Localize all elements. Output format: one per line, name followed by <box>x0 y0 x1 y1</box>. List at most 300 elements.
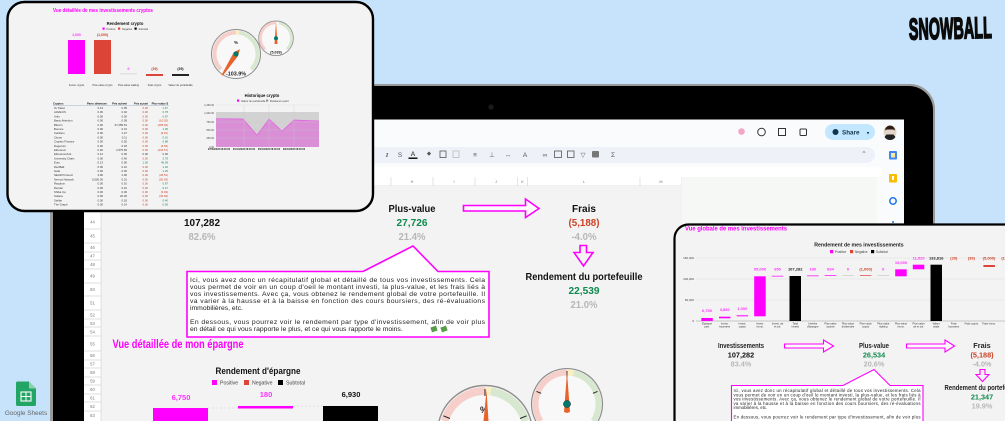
table: crypto holdings: 0.00 <box>143 169 148 173</box>
table: crypto holdings: 0.00 <box>143 203 148 207</box>
table: crypto holdings: 0.95 <box>122 161 127 165</box>
table: crypto holdings: 0.00 <box>98 182 103 186</box>
logo: Google Sheets <box>5 382 47 417</box>
bar chart: overall return: crypto <box>739 324 746 328</box>
bar chart: crypto return: Positive <box>106 27 116 31</box>
table: crypto holdings: 0.02 <box>122 110 127 114</box>
column headers: L <box>583 180 585 184</box>
table: crypto holdings: Ankr <box>54 114 60 118</box>
table: crypto holdings: University Chain <box>54 156 75 160</box>
plus-value figures <box>859 342 889 366</box>
table: crypto holdings: (265.93) <box>158 123 168 127</box>
table: crypto holdings: 0.00 <box>98 135 103 139</box>
table: crypto holdings: 0.00 <box>143 148 148 152</box>
portfolio return figures: 21,347 <box>971 392 993 402</box>
legend <box>212 380 305 386</box>
table: crypto holdings: 0.00 <box>98 194 103 198</box>
bar chart: overall return: Rendement de mes investissements <box>814 242 904 248</box>
spreadsheet screen <box>84 120 904 421</box>
bar chart: crypto return: 1,000 <box>72 33 81 37</box>
bar chart: crypto return: Invest. crypto <box>69 83 85 87</box>
bar chart: overall return: (1,000) <box>859 266 873 272</box>
table: crypto holdings: 0.00 <box>143 140 148 144</box>
table: crypto holdings: 5,000.00 <box>92 177 103 181</box>
toolbar: ↔ <box>505 152 511 159</box>
table: crypto holdings: Euro <box>54 161 60 165</box>
bar chart: overall return: (5,000) <box>983 256 996 260</box>
line chart: crypto history: 09/10/2023 08:00:00 <box>283 148 306 151</box>
bar chart: crypto return: Plus-value crypto <box>93 83 113 87</box>
tablet device <box>50 84 935 421</box>
table: crypto holdings: 0.00 <box>122 114 127 118</box>
table: crypto holdings: 0.10 <box>163 135 168 139</box>
bar chart: overall return: Invest. art <box>772 322 784 326</box>
table: crypto holdings: 0.95 <box>163 203 168 207</box>
bar chart: crypto return: Rendement crypto <box>107 21 144 26</box>
toolbar: ⊥ <box>489 152 495 159</box>
panel title: Vue globale de mes investissements <box>685 226 788 232</box>
table: crypto holdings: (3.53) <box>161 144 168 148</box>
table: crypto holdings: (9.16) <box>161 131 168 135</box>
callout: explanation <box>732 370 923 421</box>
arrow: plus-value to fees <box>464 199 539 218</box>
row numbers: 54 <box>90 330 95 334</box>
bar chart: overall return: boursiers <box>948 324 960 328</box>
bar chart: overall return: 6,750 <box>702 308 713 313</box>
line chart: crypto history: 05/10/2023 08:00:00 <box>258 148 281 151</box>
table: crypto holdings: DéciBall <box>54 165 65 169</box>
toolbar: ⌃ <box>861 150 867 158</box>
column headers: K <box>521 180 524 184</box>
fees figures: Frais <box>973 341 991 350</box>
table: crypto holdings: 0.18 <box>122 198 127 202</box>
bar chart: overall return: actions <box>826 324 835 328</box>
bar chart: overall return: Negative <box>855 250 868 254</box>
table: crypto holdings: 0.00 <box>98 140 103 144</box>
table: crypto holdings <box>53 102 169 207</box>
table: crypto holdings: 0.00 <box>98 203 103 207</box>
chart: savings return: Rendement d'épargne <box>216 366 300 377</box>
table: crypto holdings: 1.02 <box>163 165 168 169</box>
chart: savings return: 180 <box>260 390 272 399</box>
panel: crypto detail <box>8 2 373 211</box>
table: crypto holdings: 1.00 <box>143 161 148 165</box>
table: crypto holdings: Ethereum <box>54 148 67 152</box>
toolbar: ▽ <box>580 152 586 159</box>
table: crypto holdings: 0.00 <box>143 182 148 186</box>
line chart: crypto history: Valeur du portefeuille <box>241 99 266 103</box>
investments figures: 107,282 <box>184 217 220 229</box>
table: crypto holdings: Plus-value $ <box>152 102 168 106</box>
plus-value figures: Plus-value <box>388 203 436 215</box>
table: crypto holdings: 0.01 <box>122 177 127 181</box>
table: crypto holdings: 0.00 <box>143 114 148 118</box>
portfolio return figures <box>526 271 643 311</box>
table: crypto holdings: 3.96 <box>98 173 103 177</box>
callout: explanation: vos investissements. Avec ça, vous obtenez le rendement global de votre portefeuille. Il <box>190 291 485 298</box>
bar chart: overall return: art et cie. <box>913 324 924 328</box>
bar chart: overall return: Plus-value <box>842 322 855 326</box>
bar chart: overall return: Positive <box>835 250 846 254</box>
bar chart: overall return: Valeur <box>933 322 940 326</box>
gauge: savings amount <box>532 369 602 421</box>
toolbar: ≡ <box>473 152 477 159</box>
bar chart: overall return: (39) <box>968 256 976 260</box>
callout: explanation: immobilières, etc. <box>190 305 243 312</box>
bar chart: overall return: 1,000 <box>737 306 748 311</box>
line chart: crypto history: 1,000.00 <box>204 112 215 115</box>
header actions <box>738 124 896 140</box>
table: crypto holdings: 0.00 <box>98 119 103 123</box>
bar chart: overall return: 15,000 <box>895 260 908 265</box>
table: crypto holdings: Shiba Inu <box>54 190 66 194</box>
bar chart: crypto return: 0 <box>128 67 130 71</box>
toolbar: A <box>523 152 528 159</box>
bar chart: crypto return <box>68 21 193 87</box>
gauge: crypto percent: -103.9% <box>226 72 246 78</box>
investments figures <box>184 217 220 243</box>
callout: explanation: en détail ce qui vous rapporte le plus, et ce qui vous rapporte le moins. <box>190 326 403 333</box>
bar chart: overall return: totale <box>933 324 940 328</box>
bar chart: overall return: Épargne <box>702 320 712 326</box>
table: crypto holdings: Raydium <box>54 182 66 186</box>
row numbers: 47 <box>90 254 95 258</box>
table: crypto holdings: 0.00 <box>143 119 148 123</box>
table: crypto holdings: 0.00 <box>98 123 103 127</box>
investments figures: Investissements <box>718 341 764 350</box>
table: crypto holdings: Parts détenues <box>87 102 107 106</box>
fees figures: Frais <box>572 203 596 215</box>
bar chart: overall return: crypto <box>862 324 870 328</box>
bar chart: overall return: Intérêts <box>808 322 818 326</box>
table: crypto holdings: 0.00 <box>143 177 148 181</box>
row numbers: 45 <box>90 234 95 238</box>
legend: Positive <box>220 380 238 386</box>
fees figures: -4.0% <box>972 360 992 368</box>
gauge: crypto percent: % <box>234 40 238 45</box>
table: crypto holdings: Ethereumclub <box>54 152 72 156</box>
callout: explanation: Ici, vous avez donc un récapitulatif global et détaillé de tous vos investissements. Cela <box>190 277 485 284</box>
bar chart: overall return: 95,000 <box>754 266 767 272</box>
table: crypto holdings: 0.87 <box>163 182 168 186</box>
table: crypto holdings: 0.00 <box>143 127 148 131</box>
bar chart: overall return: staking <box>879 324 888 328</box>
table: crypto holdings: 0.13 <box>98 106 103 110</box>
table: crypto holdings: (50.93) <box>159 177 168 181</box>
chart: savings return <box>153 366 378 421</box>
table: crypto holdings: (45.93) <box>159 194 168 198</box>
fees figures: -4.0% <box>572 231 597 243</box>
line chart: crypto history: 500.00 <box>206 129 215 132</box>
legend: Negative <box>252 380 273 386</box>
row numbers: 56 <box>90 353 95 358</box>
panel: global overview <box>674 224 1005 421</box>
bar chart: overall return: 150,000 <box>683 256 694 260</box>
line chart: crypto history: Breakeven point <box>270 99 289 103</box>
fees figures: (5,188) <box>568 217 600 229</box>
fees figures <box>568 203 600 243</box>
bar chart: crypto return: (39) <box>177 67 184 71</box>
table: crypto holdings: Render <box>54 186 63 190</box>
table: crypto holdings: Dogecoin <box>54 144 66 148</box>
toolbar: ∞ <box>543 152 548 159</box>
bar chart: overall return: dividendes <box>842 324 855 328</box>
table: crypto holdings: 0.88 <box>163 140 168 144</box>
table: crypto holdings: 1.67 <box>163 106 168 110</box>
bar chart: overall return <box>683 242 1005 328</box>
bar chart: overall return: investi <box>792 324 799 328</box>
bar chart: overall return: Subtotal <box>876 250 888 254</box>
table: crypto holdings: 20.00 <box>120 194 127 198</box>
table: crypto holdings: 0.14 <box>122 203 127 207</box>
callout: explanation: va varier à la hausse et à la baisse en fonction des cours boursiers, des ré-évaluations <box>734 401 921 406</box>
bar chart: overall return: 180 <box>809 266 817 272</box>
gauge: crypto percent <box>212 30 260 78</box>
plus-value figures: Plus-value <box>859 341 889 350</box>
callout: explanation <box>187 246 489 337</box>
bar chart: overall return: 133,816 <box>929 256 944 260</box>
bar chart: crypto return: Plus-value staking <box>118 83 140 87</box>
table: crypto holdings: Prix actuel <box>134 102 148 106</box>
row numbers: 51 <box>90 300 95 306</box>
callout: explanation: En dessous, vous pourrez voir le rendement par type d'investissement, afin de voir plus <box>734 414 921 420</box>
header actions: Share <box>842 130 860 136</box>
callout: explanation: Ici, vous avez donc un récapitulatif global et détaillé de tous vos investissements. Cela <box>734 388 921 393</box>
table: crypto holdings: 0.00 <box>98 156 103 160</box>
bar chart: overall return: (20) <box>950 256 958 260</box>
table: crypto holdings: 0.00 <box>98 165 103 169</box>
bar chart: overall return: 11,520 <box>913 256 925 260</box>
table: crypto holdings: 0.13 <box>98 161 103 165</box>
table: crypto holdings: 2.78 <box>163 156 168 160</box>
row numbers: 49 <box>90 274 95 278</box>
line chart: crypto history: 0.00 <box>209 146 215 149</box>
legend: Subtotal <box>286 380 305 386</box>
table: crypto holdings: 0.00 <box>143 106 148 110</box>
callout: explanation: immobilières, etc. <box>734 405 767 410</box>
table: crypto holdings: Solana <box>54 194 63 198</box>
table: crypto holdings: 1.06 <box>163 127 168 131</box>
row numbers: 53 <box>90 321 95 326</box>
bar chart: overall return: 50,000 <box>685 298 694 302</box>
bar chart: overall return: Frais immo. <box>982 322 996 326</box>
table: crypto holdings: 0.40 <box>163 198 168 202</box>
row numbers: 58 <box>90 370 95 375</box>
bar chart: overall return: 0 <box>847 266 850 272</box>
table: crypto holdings: Gala <box>54 169 60 173</box>
table: crypto holdings: 0.00 <box>98 198 103 202</box>
table: crypto holdings: Cryptos <box>53 102 64 106</box>
column headers: H <box>411 180 414 184</box>
portfolio return figures: 21.0% <box>570 299 598 311</box>
table: crypto holdings: 0.00 <box>143 190 148 194</box>
right side panel <box>889 151 897 223</box>
investments figures <box>718 342 764 366</box>
portfolio return figures: Rendement du portefeuille <box>526 271 643 283</box>
table: crypto holdings: Cryptex Finance <box>54 140 75 144</box>
row numbers: 60 <box>90 387 95 392</box>
table: crypto holdings: (10.92) <box>159 119 168 123</box>
header actions: ▾ <box>867 130 870 136</box>
arrow: fees to portfolio return <box>976 370 989 382</box>
table: crypto holdings: 0.00 <box>98 186 103 190</box>
bar chart: crypto return: Frais crypto <box>148 83 162 87</box>
gauge: savings percent: % <box>480 405 488 415</box>
logo: Google Sheets: Google Sheets <box>5 410 47 417</box>
table: crypto holdings: 0.00 <box>143 144 148 148</box>
toolbar: ◆ <box>427 151 432 157</box>
fees figures <box>970 342 994 366</box>
chart: savings return: 6,750 <box>172 393 190 402</box>
row numbers: 46 <box>90 245 95 250</box>
bar chart: overall return: Total <box>792 322 798 326</box>
table: crypto holdings: 46.09 <box>161 161 168 165</box>
table: crypto holdings: Cardano <box>54 131 65 135</box>
table: crypto holdings: 0.00 <box>98 114 103 118</box>
bar chart: overall return: Invest. <box>756 322 764 326</box>
table: crypto holdings: 0.31 <box>122 127 127 131</box>
table: crypto holdings: Nervos Network <box>54 177 74 181</box>
row numbers: 59 <box>90 378 95 384</box>
callout: explanation: va varier à la hausse et à la baisse en fonction des cours boursiers, des ré-évaluations <box>190 298 486 305</box>
table: crypto holdings: Bitcoin <box>54 123 63 127</box>
table: crypto holdings: 2.00 <box>122 173 127 177</box>
row numbers: 57 <box>90 362 95 366</box>
bar chart: overall return: Plus-value <box>913 322 925 326</box>
investments figures: 82.6% <box>188 231 216 243</box>
table: crypto holdings: 0.00 <box>143 156 148 160</box>
table: crypto holdings: 0.87 <box>163 114 168 118</box>
arrow: fees to portfolio return <box>574 246 593 266</box>
formula bar <box>84 167 882 177</box>
bar chart: overall return: 107,282 <box>788 266 803 272</box>
table: crypto holdings: Bounce <box>54 127 64 131</box>
row numbers: 52 <box>90 312 95 318</box>
fees figures: (5,188) <box>970 350 994 360</box>
line chart: crypto history: 750.00 <box>206 121 215 124</box>
gauge: savings percent <box>439 385 531 421</box>
bar chart: overall return: immo. <box>897 324 905 328</box>
table: crypto holdings: 0.00 <box>143 194 148 198</box>
column headers <box>84 177 877 186</box>
bar chart: crypto return: Subtotal <box>138 27 148 31</box>
bar chart: overall return: Plus-value <box>877 322 890 326</box>
table: crypto holdings: 0.18 <box>122 144 127 148</box>
row numbers: 62 <box>90 404 95 409</box>
callout: explanation: vous permet de voir en un coup d'oeil le montant investi, la plus-value, et les frais liés à <box>734 392 921 397</box>
portfolio return figures: 19.9% <box>972 402 993 410</box>
line chart: crypto history: 01/10/2023 08:00:00 <box>233 148 256 151</box>
table: crypto holdings: 0.14 <box>98 152 103 156</box>
bar chart: overall return: 3,882 <box>720 307 730 312</box>
bar chart: overall return: Invest. <box>738 322 746 326</box>
bar chart: crypto return: (1,000) <box>97 33 108 37</box>
table: crypto holdings: 0.00 <box>143 131 148 135</box>
table: crypto holdings: 0.00 <box>143 110 148 114</box>
bar chart: overall return: et cie. <box>774 324 781 328</box>
column headers: M <box>659 180 663 184</box>
table: crypto holdings: The Graph <box>54 203 68 207</box>
line chart: crypto history: Historique crypto <box>245 93 280 98</box>
heading: savings detail: Vue détaillée de mon épargne <box>112 339 244 351</box>
arrow: plus-value to fees <box>906 340 954 352</box>
line chart: crypto history: 250.00 <box>206 137 215 140</box>
plus-value figures <box>388 203 436 243</box>
plus-value figures: 20.6% <box>864 360 885 368</box>
table: crypto holdings: 0.05 <box>122 106 127 110</box>
table: crypto holdings: 0.00 <box>122 190 127 194</box>
table: crypto holdings: 0.91 <box>122 182 127 186</box>
table: crypto holdings: 0.16 <box>122 186 127 190</box>
table: crypto holdings: 0.00 <box>143 173 148 177</box>
table: crypto holdings: NEAR Protocol <box>54 173 73 177</box>
table: crypto holdings: 0.00 <box>98 110 103 114</box>
table: crypto holdings: 0.55 <box>122 140 127 144</box>
sheet background <box>101 186 682 421</box>
bar chart: overall return: Frais <box>951 322 957 326</box>
table: crypto holdings: (46.51) <box>159 173 168 177</box>
table: crypto holdings: 0.10 <box>122 165 127 169</box>
table: crypto holdings: 0x Token <box>54 106 66 110</box>
table: crypto holdings: 2,575.56 <box>116 148 127 152</box>
row numbers: 63 <box>90 413 95 418</box>
toolbar: S <box>398 152 403 159</box>
row numbers: 48 <box>90 262 95 267</box>
table: crypto holdings: 0.35 <box>122 169 127 173</box>
gauge: crypto amount <box>259 21 293 56</box>
investments figures: 83.4% <box>731 360 752 368</box>
bar chart: crypto return: Negative <box>122 27 133 31</box>
table: crypto holdings: 0.00 <box>98 131 103 135</box>
gauge: crypto amount: (5,039) <box>270 50 282 54</box>
chart: savings return: 6,930 <box>342 390 360 399</box>
table: crypto holdings: Clover <box>54 135 62 139</box>
table: crypto holdings: 0.46 <box>122 156 127 160</box>
line chart: crypto history: 27/09/2023 08:00:00 <box>208 148 231 151</box>
line chart: crypto history: 1,250.00 <box>204 104 215 107</box>
bar chart: overall return: 834 <box>827 266 835 272</box>
callout: explanation: vos investissements. Avec ça, vous obtenez le rendement global de votre portefeuille. Il <box>734 397 921 402</box>
plus-value figures: 21.4% <box>398 231 426 243</box>
bar chart: overall return: immo. <box>756 324 764 328</box>
table: crypto holdings: 0.78 <box>163 110 168 114</box>
toolbar: I <box>385 152 389 159</box>
table: crypto holdings: 0.00 <box>98 144 103 148</box>
table: crypto holdings: 0.00 <box>143 165 148 169</box>
bar chart: overall return: Plus-value <box>824 322 837 326</box>
panel title: Vue détaillée de mes investissements cryptos <box>53 8 153 14</box>
table: crypto holdings: 0.00 <box>143 186 148 190</box>
bar chart: crypto return: Valeur du portefeuille <box>168 83 193 87</box>
table: crypto holdings: 37,285.51 <box>115 123 127 127</box>
table: crypto holdings: 0.00 <box>98 127 103 131</box>
table: crypto holdings: Stellar <box>54 198 62 202</box>
row numbers: 50 <box>90 287 95 292</box>
plus-value figures: 27,726 <box>396 217 428 229</box>
table: crypto holdings: 1.27 <box>122 131 127 135</box>
bar chart: overall return: Invest. <box>721 322 729 326</box>
table: crypto holdings: 0.20 <box>98 148 103 152</box>
toolbar: A <box>411 151 416 158</box>
table: crypto holdings: (404.57) <box>158 148 168 152</box>
table: crypto holdings: Basic Attention <box>54 119 73 123</box>
table: crypto holdings: (3.93) <box>161 190 168 194</box>
portfolio return figures <box>944 384 1005 408</box>
line chart: crypto history <box>204 93 319 151</box>
table: crypto holdings: 0.00 <box>143 198 148 202</box>
table: crypto holdings: 0.00 <box>143 123 148 127</box>
plus-value figures: 26,534 <box>863 350 886 360</box>
